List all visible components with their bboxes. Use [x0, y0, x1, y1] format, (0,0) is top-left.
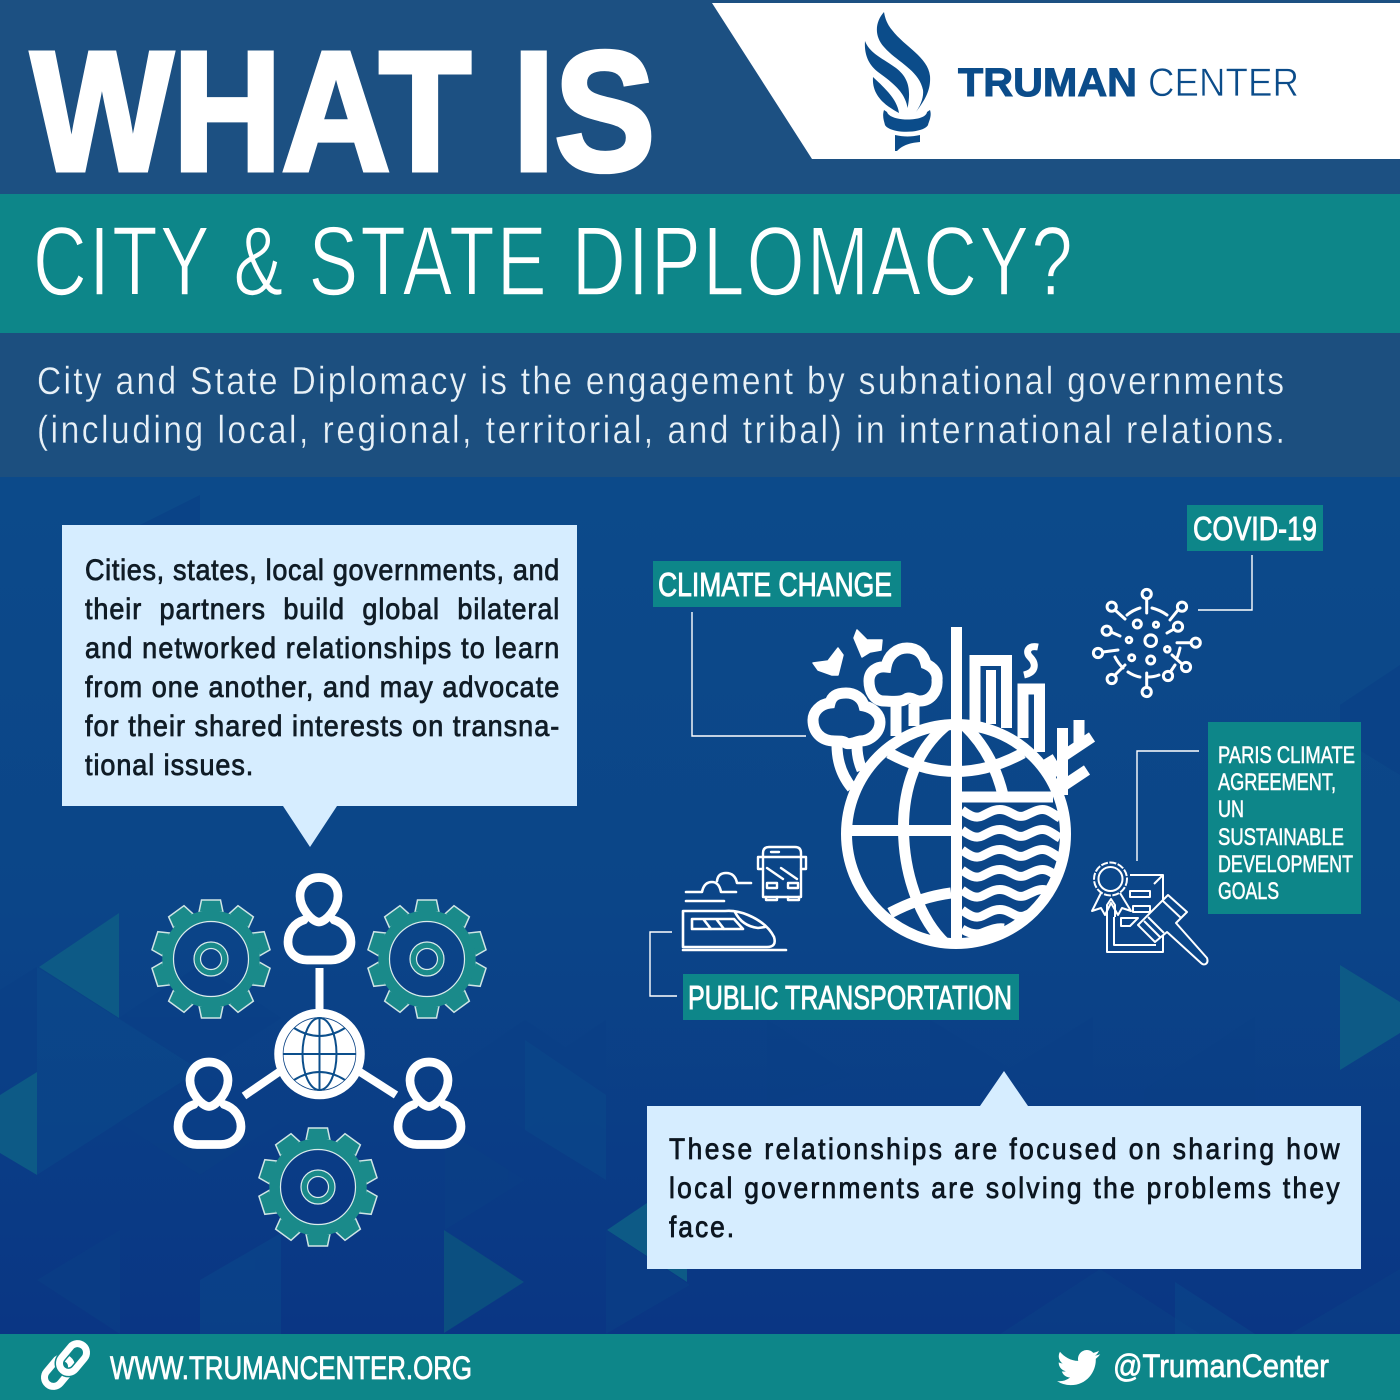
callout: right problem solving: local governments are solving the problems they	[669, 1170, 1340, 1204]
icon: train and clouds	[683, 873, 786, 950]
main background	[0, 477, 1400, 1334]
label: Public transportation	[683, 974, 1019, 1020]
document outline	[1107, 875, 1163, 952]
icon: person right	[398, 1062, 461, 1144]
globe outline	[846, 724, 1066, 944]
callout: right problem solving	[647, 1071, 1361, 1269]
callout: right problem solving: These relationships are focused on sharing how	[669, 1131, 1340, 1165]
callout: right problem solving: face.	[669, 1209, 734, 1243]
icon: climate globe	[813, 627, 1092, 945]
label: Paris agreement and SDGs: UN	[1218, 796, 1244, 823]
background triangle pattern	[0, 495, 1400, 1334]
center axis	[951, 627, 962, 945]
network diagram	[151, 878, 487, 1246]
label: Climate change: CLIMATE CHANGE	[658, 566, 892, 603]
logo panel	[712, 3, 1400, 159]
label: Paris agreement and SDGs: DEVELOPMENT	[1218, 851, 1353, 878]
icon: gear right	[367, 900, 487, 1018]
label: COVID-19: COVID-19	[1193, 510, 1317, 547]
label: COVID-19	[1187, 505, 1323, 551]
logo wordmark	[958, 61, 1299, 105]
right tree	[869, 648, 937, 702]
icon: central globe	[278, 1013, 360, 1095]
title: What is: WHAT IS	[31, 17, 655, 207]
logo wordmark: TRUMAN	[958, 61, 1137, 105]
icon: person left	[178, 1062, 241, 1144]
connectors	[244, 968, 396, 1096]
label: Paris agreement and SDGs: SUSTAINABLE	[1218, 824, 1344, 851]
icon: virus	[1093, 589, 1200, 697]
label: Public transportation: PUBLIC TRANSPORTATION	[688, 979, 1012, 1016]
callout: left relationships	[62, 525, 577, 847]
definition band	[0, 333, 1400, 477]
definition text: (including local, regional, territorial, and tribal) in international relations.	[37, 408, 1285, 452]
latitude lines	[889, 753, 1023, 772]
label: Paris agreement and SDGs: PARIS CLIMATE	[1218, 742, 1355, 769]
definition text	[37, 359, 1285, 452]
icon: person top	[288, 878, 351, 960]
icon: bus	[758, 847, 806, 900]
left meridian	[903, 724, 948, 944]
icon: agreement, rosette and gavel	[1092, 862, 1207, 964]
left tree	[813, 693, 880, 744]
subtitle band	[0, 194, 1400, 333]
icon: link	[41, 1340, 90, 1390]
smoke	[1024, 647, 1038, 675]
callout: left relationships: for their shared interests on transna-	[85, 710, 559, 743]
birds	[813, 630, 882, 675]
footer twitter handle: @TrumanCenter	[1113, 1348, 1329, 1384]
label: Paris agreement and SDGs	[1208, 722, 1361, 914]
icon: gear bottom	[258, 1128, 378, 1246]
subtitle: CITY & STATE DIPLOMACY?	[33, 207, 1073, 316]
callout: left relationships: from one another, and may advocate	[85, 671, 559, 704]
label: Paris agreement and SDGs: AGREEMENT,	[1218, 769, 1336, 796]
callout: left relationships: and networked relationships to learn	[85, 632, 559, 665]
waves	[962, 809, 1060, 934]
branches	[1048, 720, 1092, 795]
label: Climate change	[653, 561, 901, 607]
callout: left relationships: Cities, states, local governments, and	[85, 554, 559, 587]
footer band	[0, 1334, 1400, 1400]
definition text: City and State Diplomacy is the engagement by subnational governments	[37, 359, 1284, 403]
callout: left relationships: tional issues.	[85, 749, 253, 782]
buildings	[975, 660, 1006, 728]
connector lines	[650, 555, 1252, 996]
icon: twitter bird	[1057, 1350, 1100, 1385]
right meridian	[964, 725, 1003, 795]
label: Paris agreement and SDGs: GOALS	[1218, 878, 1279, 905]
footer website: WWW.TRUMANCENTER.ORG	[110, 1350, 472, 1386]
icon: gear left	[151, 900, 271, 1018]
logo wordmark: CENTER	[1148, 61, 1299, 105]
callout: left relationships: their partners build global bilateral	[85, 593, 559, 626]
building window bar	[986, 670, 996, 724]
header band	[0, 0, 1400, 194]
icon: torch logo	[865, 12, 931, 151]
rosette	[1098, 867, 1122, 891]
gavel	[1138, 895, 1207, 964]
